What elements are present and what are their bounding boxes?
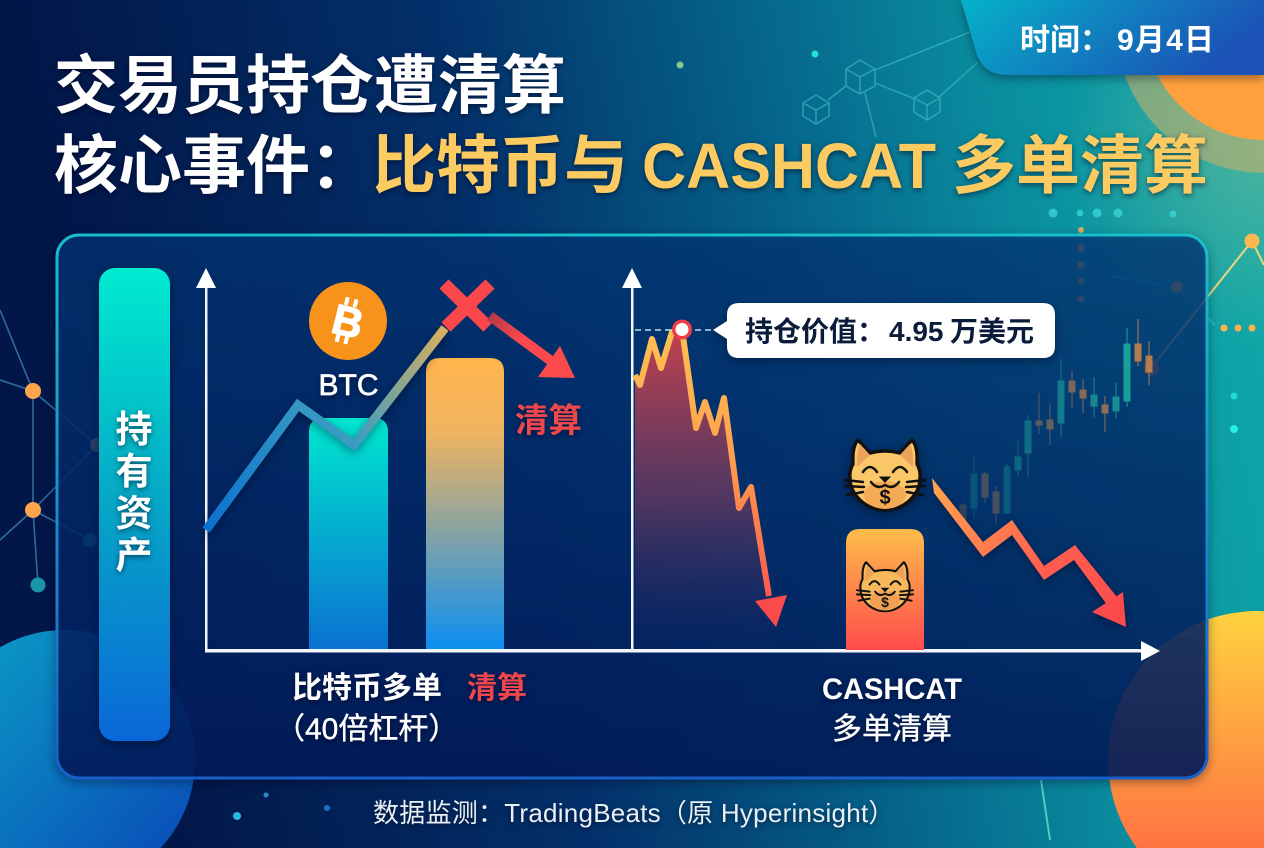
icon: large cat face [845, 440, 925, 510]
x label: CASHCAT long [822, 673, 962, 746]
vertical label bar: 持有资产: 持 [116, 409, 152, 450]
BTC label: BTC [318, 369, 378, 402]
arrow: CASHCAT fall [932, 478, 1126, 627]
data source footer: 数据监测：TradingBeats（原 Hyperinsight） [373, 798, 895, 828]
panel: main chart card [57, 235, 1207, 778]
title: 多单清算 [952, 130, 1208, 202]
x label: bitcoin long: 清算 [467, 672, 527, 705]
callout: position value [713, 303, 1055, 358]
icon: large cat face: $ [879, 487, 891, 509]
title: 交易员持仓遭清算 [54, 50, 566, 122]
vertical label bar: 持有资产: 资 [116, 493, 152, 534]
icon: liquidation cross [444, 284, 490, 327]
arrow: BTC fall [490, 316, 575, 378]
x label: CASHCAT long: 多单清算 [832, 713, 952, 746]
date badge: 时间： [1020, 24, 1110, 57]
x label: bitcoin long: （40倍杠杆） [275, 713, 458, 746]
value marker [672, 320, 692, 340]
BTC price line [206, 328, 445, 530]
vertical label bar: 持有资产: 产 [116, 535, 152, 576]
decorative dots [233, 50, 1256, 820]
date badge: 9月4日 [1117, 24, 1214, 57]
x label: bitcoin long: 比特币多单 [292, 672, 442, 705]
bar: CASHCAT [846, 529, 924, 650]
background candlestick chart [960, 319, 1152, 527]
chart axes [196, 268, 1160, 661]
callout: position value: 持仓价值： [745, 316, 885, 347]
bar: BTC teal [309, 418, 388, 650]
icon: bitcoin coin: B [327, 295, 368, 348]
BTC liquidation label: 清算 [515, 403, 582, 440]
icon: small cat face: $ [881, 594, 889, 610]
bar: BTC orange [426, 358, 504, 650]
network decoration: left nodes [0, 310, 104, 592]
title: 比特币与 [372, 130, 628, 202]
x label: CASHCAT long: CASHCAT [822, 673, 962, 706]
network decoration: right nodes [1077, 234, 1264, 376]
area chart: CASHCAT price fall [635, 329, 787, 650]
vertical label bar: 持有资产: 有 [116, 451, 152, 492]
callout: position value: 万美元 [950, 316, 1034, 347]
network decoration: cubes [803, 32, 978, 137]
title: 核心事件： [54, 130, 374, 202]
title [54, 50, 1208, 202]
icon: bitcoin coin [309, 282, 387, 360]
value marker dashed guide [635, 329, 716, 331]
icon: small cat face [857, 562, 913, 611]
callout: position value: 4.95 [889, 316, 944, 347]
title: CASHCAT [642, 130, 936, 202]
x label: bitcoin long [275, 672, 527, 746]
vertical label bar: 持有资产 [99, 268, 170, 741]
date badge [961, 0, 1264, 75]
